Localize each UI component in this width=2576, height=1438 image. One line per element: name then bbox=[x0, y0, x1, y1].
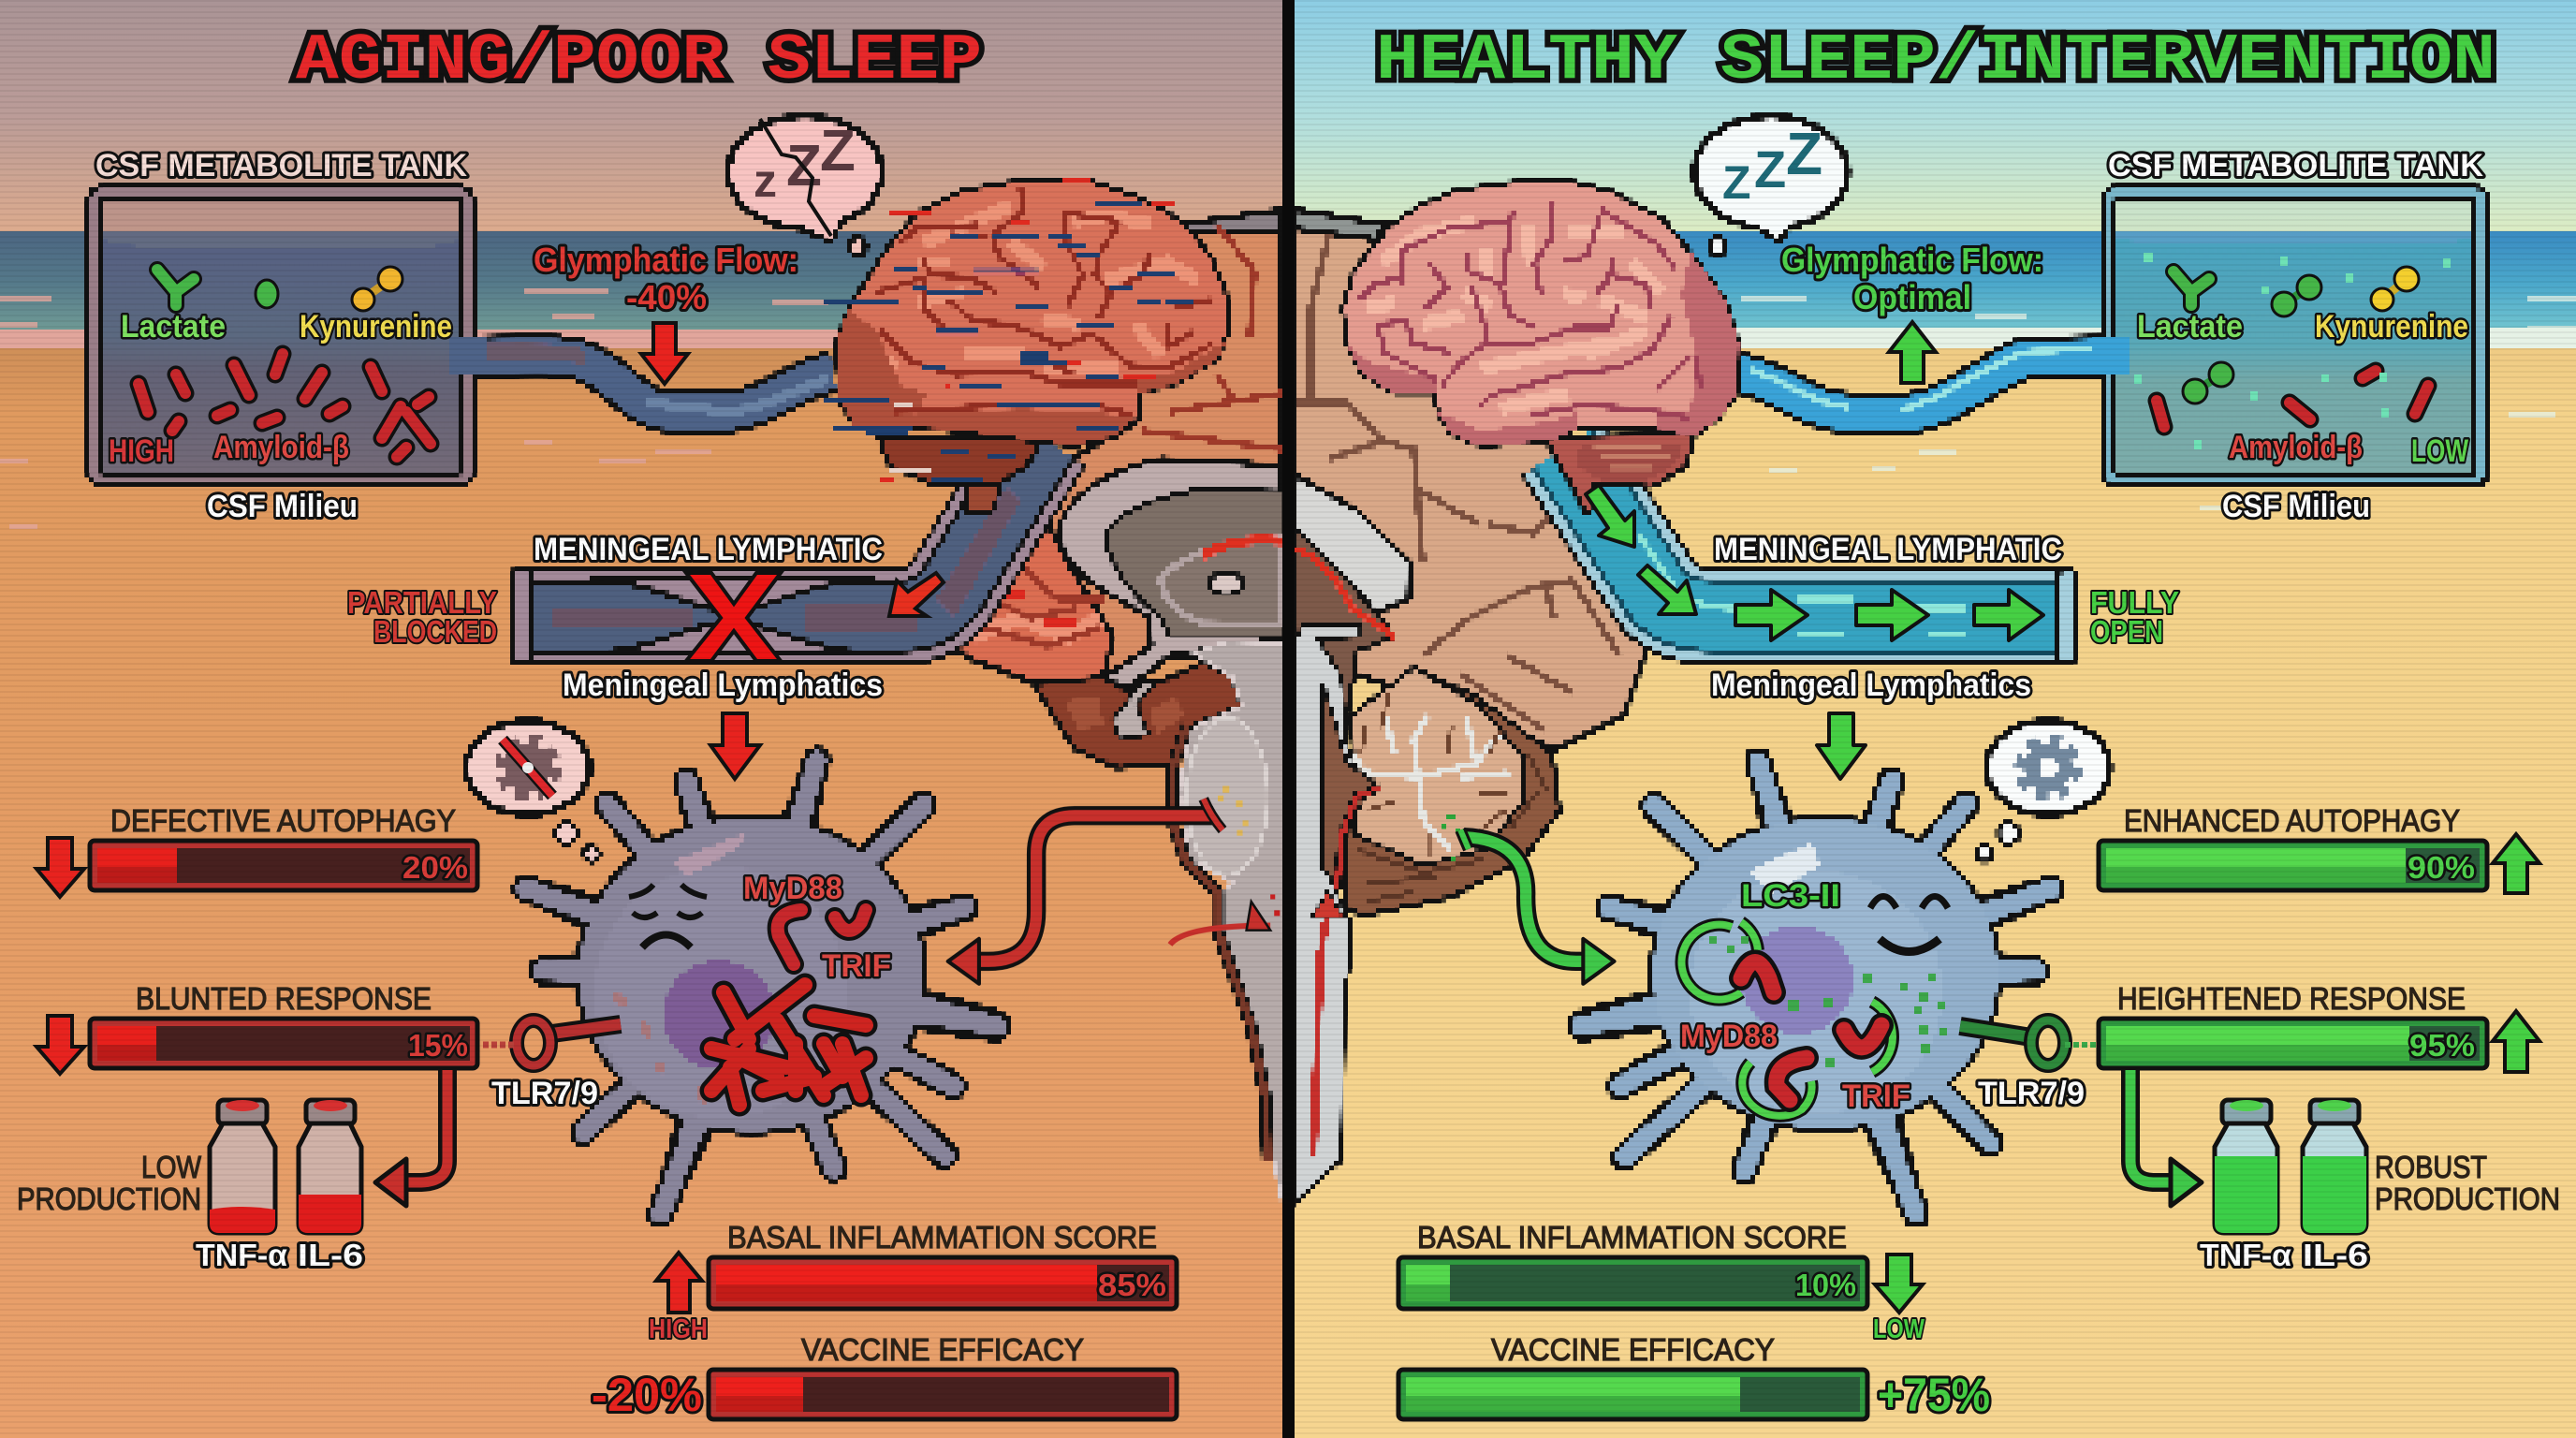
bar: heightened response: HEIGHTENED RESPONSE bbox=[2117, 981, 2466, 1016]
bubble: broken gear bbox=[466, 721, 599, 861]
bubble: broken sleep zzz: z bbox=[754, 154, 777, 207]
degradation particles bbox=[1709, 936, 1947, 1067]
tank labels: Amyloid-β bbox=[213, 430, 349, 465]
tank labels: Kynurenine bbox=[2315, 309, 2468, 345]
immune cell: sad, overloaded: TRIF bbox=[822, 948, 891, 984]
tank labels: Lactate bbox=[2137, 309, 2243, 345]
meningeal labels: BLOCKED bbox=[373, 614, 497, 649]
tank labels bbox=[109, 309, 452, 469]
section view of head: left half bbox=[936, 210, 1282, 1202]
bar: defective autophagy: 20% bbox=[402, 850, 468, 885]
bubble: restful sleep zzz: Z bbox=[1722, 156, 1751, 209]
tangled aggregates bbox=[711, 985, 866, 1105]
tank label: CSF METABOLITE TANK bbox=[2108, 148, 2483, 183]
arrow: cerebellum to cell bbox=[1460, 830, 1614, 984]
TLR receptor bbox=[1960, 1020, 2097, 1065]
bar: basal inflammation, high: BASAL INFLAMMATION SCORE bbox=[727, 1220, 1157, 1255]
immune cell: happy, active: TLR7/9 bbox=[1978, 1076, 2085, 1111]
autophagosome arcs and cargo bbox=[1681, 922, 1893, 1116]
cytokine vials, low: IL-6 bbox=[298, 1238, 363, 1272]
section view of head: right half bbox=[1295, 210, 1647, 1202]
brain: healthy bbox=[1342, 181, 1739, 515]
cytokine vials, robust: IL-6 bbox=[2303, 1238, 2368, 1272]
bar: enhanced autophagy bbox=[2099, 803, 2539, 893]
bar: basal inflammation, high: HIGH bbox=[649, 1314, 708, 1344]
glymphatic flow readout: Glymphatic Flow: bbox=[534, 241, 798, 279]
cytokine vials, robust bbox=[2200, 1100, 2560, 1272]
glymphatic flow readout bbox=[1781, 241, 2043, 383]
meningeal labels: MENINGEAL LYMPHATIC bbox=[534, 532, 883, 567]
background: bright beach bbox=[1295, 0, 2576, 1438]
bubble: restful sleep zzz bbox=[1694, 116, 1848, 255]
immune cell: sad, overloaded bbox=[483, 760, 998, 1214]
bubble: broken sleep zzz: Z bbox=[820, 119, 856, 183]
meningeal labels and flow arrows: FULLY bbox=[2090, 585, 2179, 620]
meningeal lymphatic vessel, fully open bbox=[1563, 449, 2076, 663]
bubble: working gear bbox=[1977, 721, 2110, 861]
arrow in vessel bbox=[889, 573, 944, 616]
bar: enhanced autophagy: 90% bbox=[2408, 850, 2475, 885]
background: dusk beach bbox=[0, 0, 1282, 1438]
glymphatic flow readout: -40% bbox=[626, 278, 707, 316]
bar: enhanced autophagy: ENHANCED AUTOPHAGY bbox=[2124, 803, 2460, 838]
blockage X bbox=[686, 573, 781, 661]
sad face bbox=[629, 885, 707, 947]
caption: CSF Milieu bbox=[2222, 489, 2370, 524]
panel heading: healthy: HEALTHY SLEEP/INTERVENTION bbox=[1376, 24, 2496, 98]
arrow: response to cytokine vials bbox=[2130, 1070, 2202, 1206]
molecules bbox=[2174, 267, 2419, 404]
tank labels: Kynurenine bbox=[300, 309, 452, 345]
cytokine vials, low: PRODUCTION bbox=[17, 1181, 201, 1216]
tank labels: Lactate bbox=[121, 309, 226, 345]
bar: basal inflammation, high bbox=[649, 1220, 1177, 1344]
happy face bbox=[1870, 897, 1948, 951]
cytokine vials, low: LOW bbox=[141, 1150, 202, 1184]
center divider bbox=[1282, 0, 1295, 1438]
bar: vaccine efficacy, reduced bbox=[592, 1332, 1177, 1421]
immune cell: happy, active: TRIF bbox=[1842, 1078, 1910, 1114]
immune cell: sad, overloaded: TLR7/9 bbox=[491, 1076, 598, 1111]
bubble: broken sleep zzz: Z bbox=[786, 134, 822, 198]
bubble: restful sleep zzz: Z bbox=[1754, 139, 1786, 198]
arrow: response to cytokine vials bbox=[375, 1070, 447, 1206]
bar: vaccine efficacy, reduced: -20% bbox=[592, 1369, 702, 1421]
cytokine vials, low bbox=[17, 1100, 363, 1272]
tank labels: HIGH bbox=[109, 433, 174, 469]
tank vessel bbox=[95, 193, 487, 479]
glymphatic flow readout bbox=[534, 241, 798, 384]
cerebellum stub bbox=[1544, 433, 1693, 515]
immune cell: happy, active: LC3-II bbox=[1741, 878, 1840, 914]
bar: basal inflammation, low: 10% bbox=[1795, 1268, 1856, 1302]
bar: basal inflammation, high: 85% bbox=[1098, 1268, 1166, 1302]
arrow up bbox=[1889, 322, 1936, 383]
meningeal labels: PARTIALLY bbox=[347, 585, 497, 620]
bar: basal inflammation, low: LOW bbox=[1873, 1314, 1925, 1344]
tank label: CSF METABOLITE TANK bbox=[95, 148, 467, 183]
arrow: spine signal to cell bbox=[948, 786, 1280, 984]
cytokine vials, low: TNF-α bbox=[196, 1238, 287, 1272]
panel: aging / poor sleep bbox=[0, 0, 1282, 1438]
cerebellum stub bbox=[878, 437, 1039, 484]
immune cell: sad, overloaded: MyD88 bbox=[743, 871, 842, 906]
bar: vaccine efficacy, boosted: +75% bbox=[1878, 1369, 1990, 1421]
lactate and kynurenine molecules bbox=[157, 267, 402, 311]
bar: basal inflammation, low: BASAL INFLAMMATION SCORE bbox=[1417, 1220, 1847, 1255]
cytokine vials, robust: ROBUST bbox=[2375, 1150, 2487, 1184]
meningeal labels and flow arrows: MENINGEAL LYMPHATIC bbox=[1714, 532, 2062, 567]
bar: heightened response bbox=[2099, 981, 2539, 1072]
lymphatic outflow from brain to tank bbox=[1736, 348, 2111, 413]
caption: CSF Milieu bbox=[207, 489, 358, 524]
immune cell: happy, active bbox=[1580, 761, 2097, 1214]
panel heading: aging: AGING/POOR SLEEP bbox=[296, 24, 982, 98]
bubble: restful sleep zzz: Z bbox=[1786, 120, 1822, 187]
TLR receptor bbox=[483, 1020, 621, 1065]
arrow down bbox=[641, 323, 688, 384]
bar: vaccine efficacy, boosted: VACCINE EFFICACY bbox=[1491, 1332, 1775, 1367]
lymphatic inflow tube to brain (glymphatic) bbox=[468, 351, 833, 412]
bar: vaccine efficacy, boosted bbox=[1398, 1332, 1990, 1421]
meningeal labels and flow arrows bbox=[1586, 485, 2179, 779]
bubble: broken sleep zzz bbox=[728, 116, 882, 255]
meningeal labels and flow arrows: Meningeal Lymphatics bbox=[1711, 668, 2031, 703]
tank labels: Amyloid-β bbox=[2229, 430, 2363, 465]
meningeal labels and flow arrows: OPEN bbox=[2090, 614, 2163, 649]
amyloid fragments bbox=[139, 354, 431, 457]
brain: damaged with glitches bbox=[824, 179, 1229, 512]
bar: basal inflammation, low bbox=[1398, 1220, 1925, 1344]
adaptor squiggles bbox=[778, 910, 866, 964]
tank labels bbox=[2137, 309, 2469, 469]
immune cell: happy, active: MyD88 bbox=[1680, 1019, 1778, 1054]
tank labels: LOW bbox=[2411, 433, 2469, 469]
meningeal labels bbox=[347, 532, 944, 779]
meningeal labels: Meningeal Lymphatics bbox=[563, 668, 883, 703]
bar: blunted response: BLUNTED RESPONSE bbox=[136, 981, 432, 1016]
tank: CSF metabolite, right bbox=[2092, 148, 2483, 524]
panel: healthy sleep / intervention bbox=[1295, 0, 2576, 1438]
bar: vaccine efficacy, reduced: VACCINE EFFICACY bbox=[801, 1332, 1084, 1367]
glymphatic flow readout: Glymphatic Flow: bbox=[1781, 241, 2043, 279]
bar: blunted response: 15% bbox=[408, 1028, 468, 1063]
arrow down to cell bbox=[710, 713, 760, 779]
tank: CSF metabolite, left bbox=[95, 148, 487, 524]
green flow arrows bbox=[1586, 485, 2043, 779]
tank vessel bbox=[2092, 193, 2481, 479]
bar: heightened response: 95% bbox=[2409, 1028, 2475, 1063]
meningeal lymphatic vessel, partially blocked bbox=[511, 440, 1044, 663]
bar: defective autophagy: DEFECTIVE AUTOPHAGY bbox=[110, 803, 456, 838]
cytokine vials, robust: TNF-α bbox=[2200, 1238, 2291, 1272]
bar: defective autophagy bbox=[37, 803, 477, 897]
amyloid fragments, few bbox=[2157, 371, 2428, 427]
sparkles bbox=[2134, 253, 2451, 449]
glymphatic flow readout: Optimal bbox=[1853, 278, 1971, 316]
bar: blunted response bbox=[37, 981, 477, 1074]
